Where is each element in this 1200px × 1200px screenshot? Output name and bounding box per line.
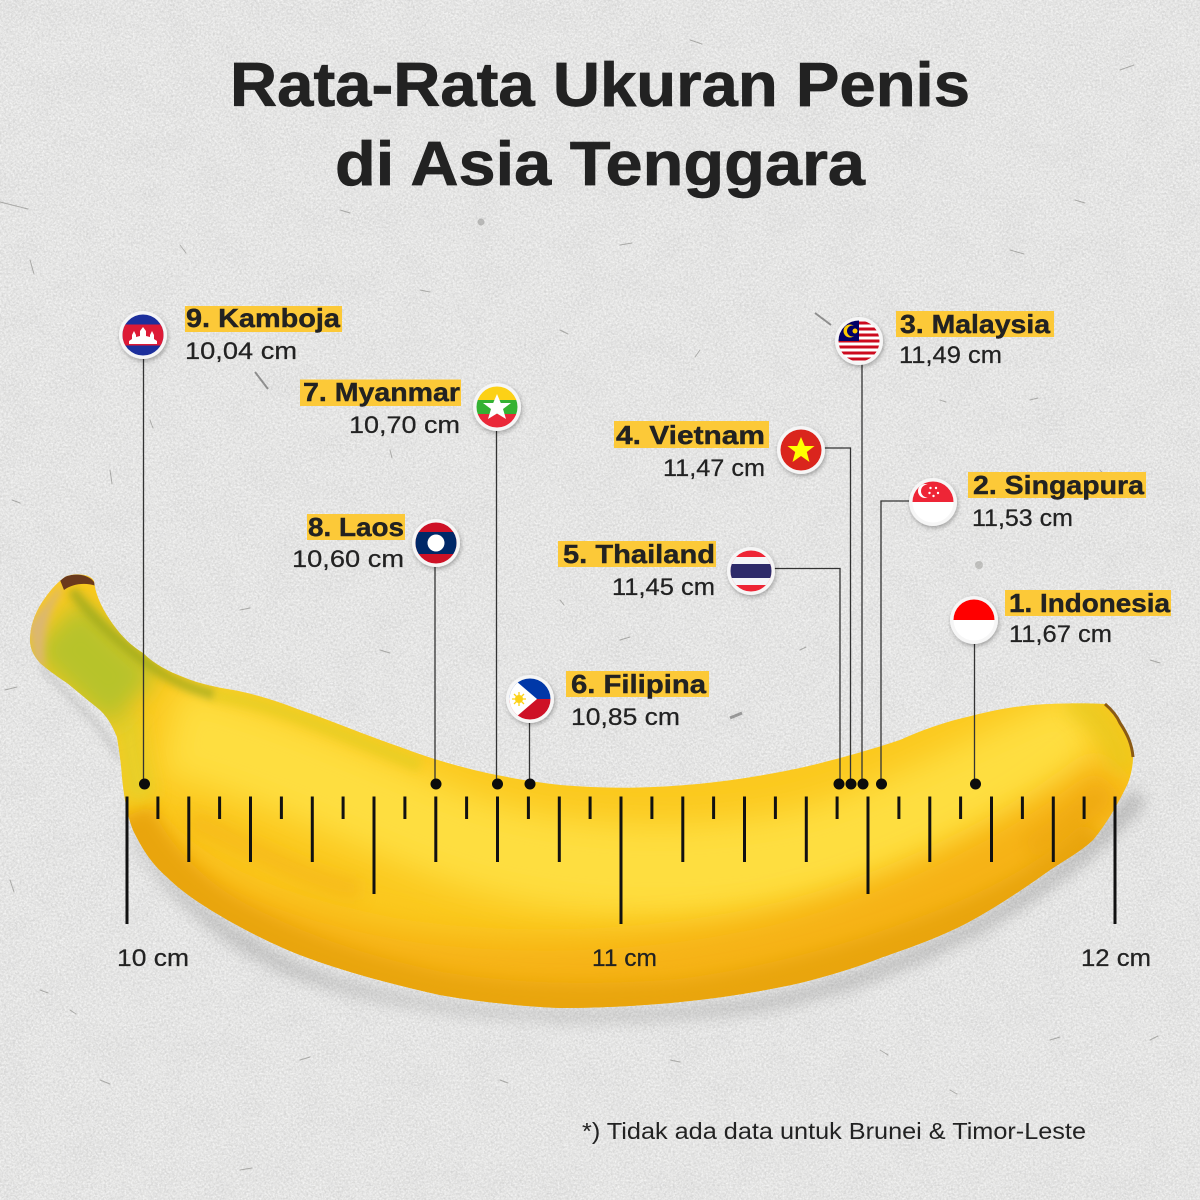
label: Malaysia (896, 309, 1054, 369)
label: Kamboja: 9. Kamboja (186, 303, 341, 333)
label: Laos: 8. Laos (308, 512, 404, 542)
ruler axis labels: 12 cm (1081, 945, 1151, 972)
ruler ticks (127, 796, 1115, 924)
ruler axis labels: 10 cm (117, 945, 189, 972)
label: Filipina (566, 669, 709, 731)
footnote: *) Tidak ada data untuk Brunei & Timor-Leste (582, 1118, 1086, 1144)
title (230, 51, 970, 199)
label: Thailand: 5. Thailand (563, 539, 715, 569)
label: Singapura (968, 470, 1146, 532)
label: Myanmar: 10,70 cm (349, 412, 460, 439)
flag: Vietnam (777, 426, 825, 474)
label: Thailand (558, 539, 716, 601)
label: Malaysia: 11,49 cm (899, 342, 1002, 369)
label: Vietnam (614, 420, 769, 482)
label: Singapura: 2. Singapura (973, 470, 1145, 500)
flag: Laos (412, 519, 460, 567)
label: Filipina: 10,85 cm (571, 704, 680, 731)
flag: Filipina (506, 675, 554, 723)
ruler axis labels (117, 945, 1151, 972)
label: Kamboja: 10,04 cm (185, 338, 297, 365)
ruler axis labels: 11 cm (592, 945, 657, 972)
label: Laos (292, 512, 405, 573)
title: di Asia Tenggara (335, 130, 866, 199)
label: Singapura: 11,53 cm (972, 505, 1073, 532)
label: Myanmar (300, 377, 461, 439)
connector lines (144, 355, 974, 784)
label: Myanmar: 7. Myanmar (303, 377, 460, 407)
measurement dots (139, 778, 981, 790)
label: Vietnam: 4. Vietnam (616, 420, 765, 450)
flag: Indonesia (950, 596, 998, 644)
title: Rata-Rata Ukuran Penis (230, 51, 970, 120)
label: Indonesia: 1. Indonesia (1009, 588, 1171, 618)
flag: Singapura (909, 478, 957, 526)
label: Indonesia (1005, 588, 1171, 648)
flag: Thailand (727, 547, 775, 595)
flag: Kamboja (119, 311, 167, 359)
flag: Myanmar (473, 383, 521, 431)
label: Kamboja (185, 303, 342, 365)
banana illustration (20, 560, 1150, 1020)
label: Filipina: 6. Filipina (571, 669, 707, 699)
label: Malaysia: 3. Malaysia (900, 309, 1051, 339)
label: Vietnam: 11,47 cm (663, 455, 765, 482)
label: Thailand: 11,45 cm (612, 574, 715, 601)
flag: Malaysia (835, 317, 883, 365)
label: Indonesia: 11,67 cm (1009, 621, 1112, 648)
label: Laos: 10,60 cm (292, 546, 404, 573)
